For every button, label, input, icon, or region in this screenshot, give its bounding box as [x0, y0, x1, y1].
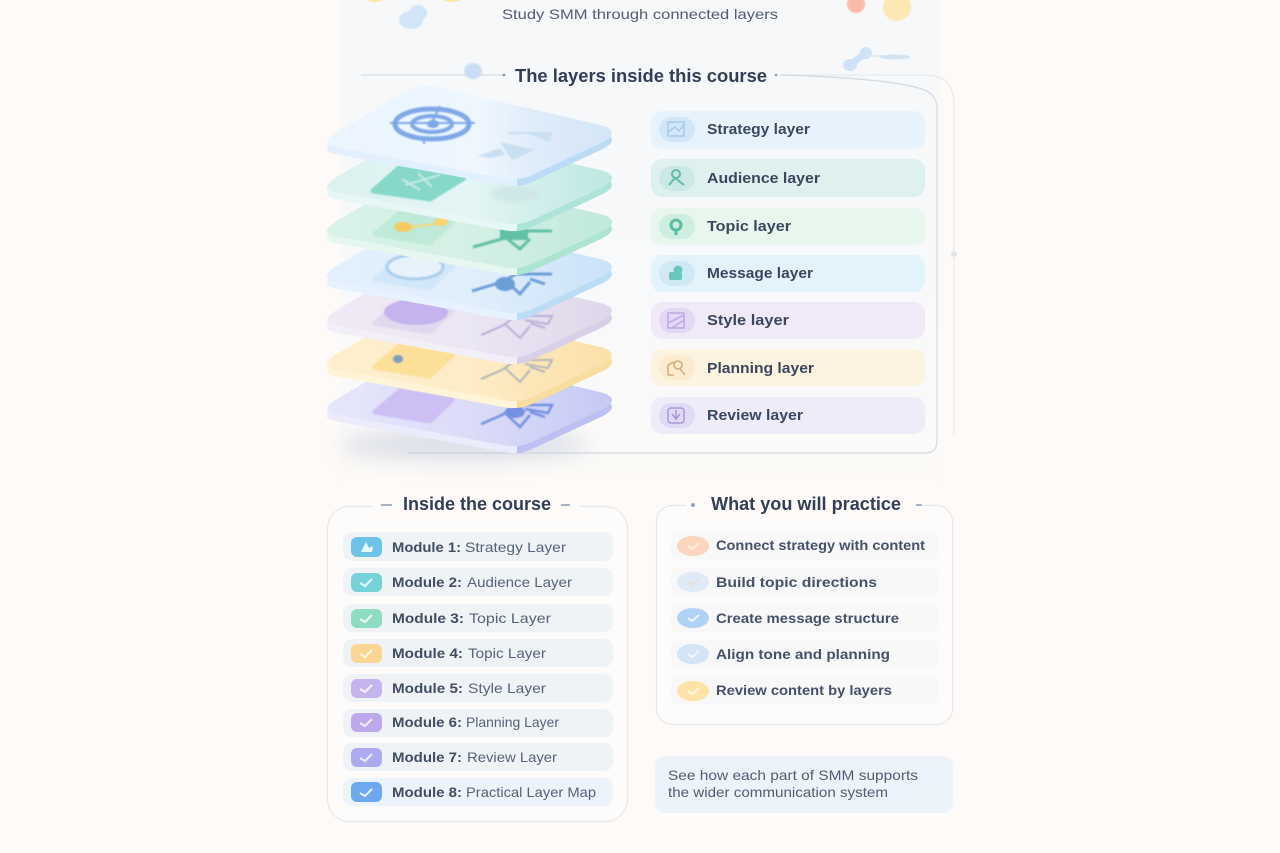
module 4 [343, 639, 613, 667]
heading connector left [361, 63, 505, 79]
module 1: Strategy Layer [465, 539, 566, 555]
panel: inside the course [328, 494, 628, 822]
legend item: topic [651, 208, 925, 245]
practice item 2: Build topic directions [716, 574, 877, 590]
module 7 [343, 743, 613, 771]
module 7: Review Layer [467, 749, 557, 765]
layer card 2: audience [327, 131, 612, 231]
practice item 4 [671, 640, 939, 669]
practice item 5: Review content by layers [716, 682, 892, 698]
module 5 [343, 674, 613, 702]
module 5: Module 5: [392, 680, 463, 696]
module 8 [343, 778, 613, 806]
layer legend [651, 111, 925, 434]
subtitle: Study SMM through connected layers [502, 6, 778, 22]
layer card 5: style [327, 264, 612, 364]
heading: What you will practice [711, 494, 901, 514]
legend item: planning: Planning layer [707, 360, 814, 377]
legend item: style: Style layer [707, 312, 789, 329]
practice item 2 [671, 567, 939, 596]
practice item 1 [671, 531, 939, 560]
legend item: audience [651, 159, 925, 197]
module 2: Audience Layer [467, 574, 572, 590]
practice item 3 [671, 604, 939, 633]
panel: what you will practice [656, 494, 952, 724]
module 6 [343, 709, 613, 737]
section heading: The layers inside this course [515, 66, 767, 86]
layer stack illustration [327, 86, 612, 453]
layer card 1: strategy [327, 86, 612, 186]
legend item: review: Review layer [707, 407, 803, 424]
module 3 [343, 604, 613, 632]
module 1: Module 1: [392, 539, 461, 555]
layer card 3: topic [327, 175, 612, 275]
legend item: style [651, 302, 925, 339]
module 6: Module 6: [392, 714, 462, 730]
background panel [341, 0, 939, 480]
frame lines [408, 74, 957, 453]
legend item: audience: Audience layer [707, 170, 820, 187]
legend item: strategy [651, 111, 925, 149]
callout [655, 756, 953, 813]
callout: the wider communication system [668, 784, 888, 800]
module 3: Module 3: [392, 610, 464, 626]
module 1 [343, 532, 613, 561]
layer card 6: planning [327, 308, 612, 408]
decorative top blobs [366, 0, 911, 71]
layer card 7: review [327, 353, 612, 453]
icon: target [390, 106, 475, 144]
legend item: message: Message layer [707, 265, 813, 282]
module 7: Module 7: [392, 749, 462, 765]
callout: See how each part of SMM supports [668, 767, 918, 783]
legend item: message [651, 255, 925, 292]
module 8: Practical Layer Map [466, 784, 596, 800]
module 5: Style Layer [468, 680, 546, 696]
heading: Inside the course [403, 494, 551, 514]
module 8: Module 8: [392, 784, 462, 800]
stack shadow [340, 430, 590, 460]
legend item: strategy: Strategy layer [707, 121, 810, 138]
practice item 4: Align tone and planning [716, 646, 890, 662]
layer card 4: message [327, 220, 612, 320]
module 2 [343, 568, 613, 596]
module 4: Topic Layer [468, 645, 546, 661]
legend item: review [651, 397, 925, 434]
module 6: Planning Layer [466, 714, 559, 730]
practice item 1: Connect strategy with content [716, 537, 925, 553]
module 2: Module 2: [392, 574, 462, 590]
legend item: planning [651, 349, 925, 386]
module 3: Topic Layer [469, 610, 551, 626]
practice item 5 [671, 676, 939, 705]
module 4: Module 4: [392, 645, 463, 661]
practice item 3: Create message structure [716, 610, 899, 626]
legend item: topic: Topic layer [707, 218, 791, 235]
